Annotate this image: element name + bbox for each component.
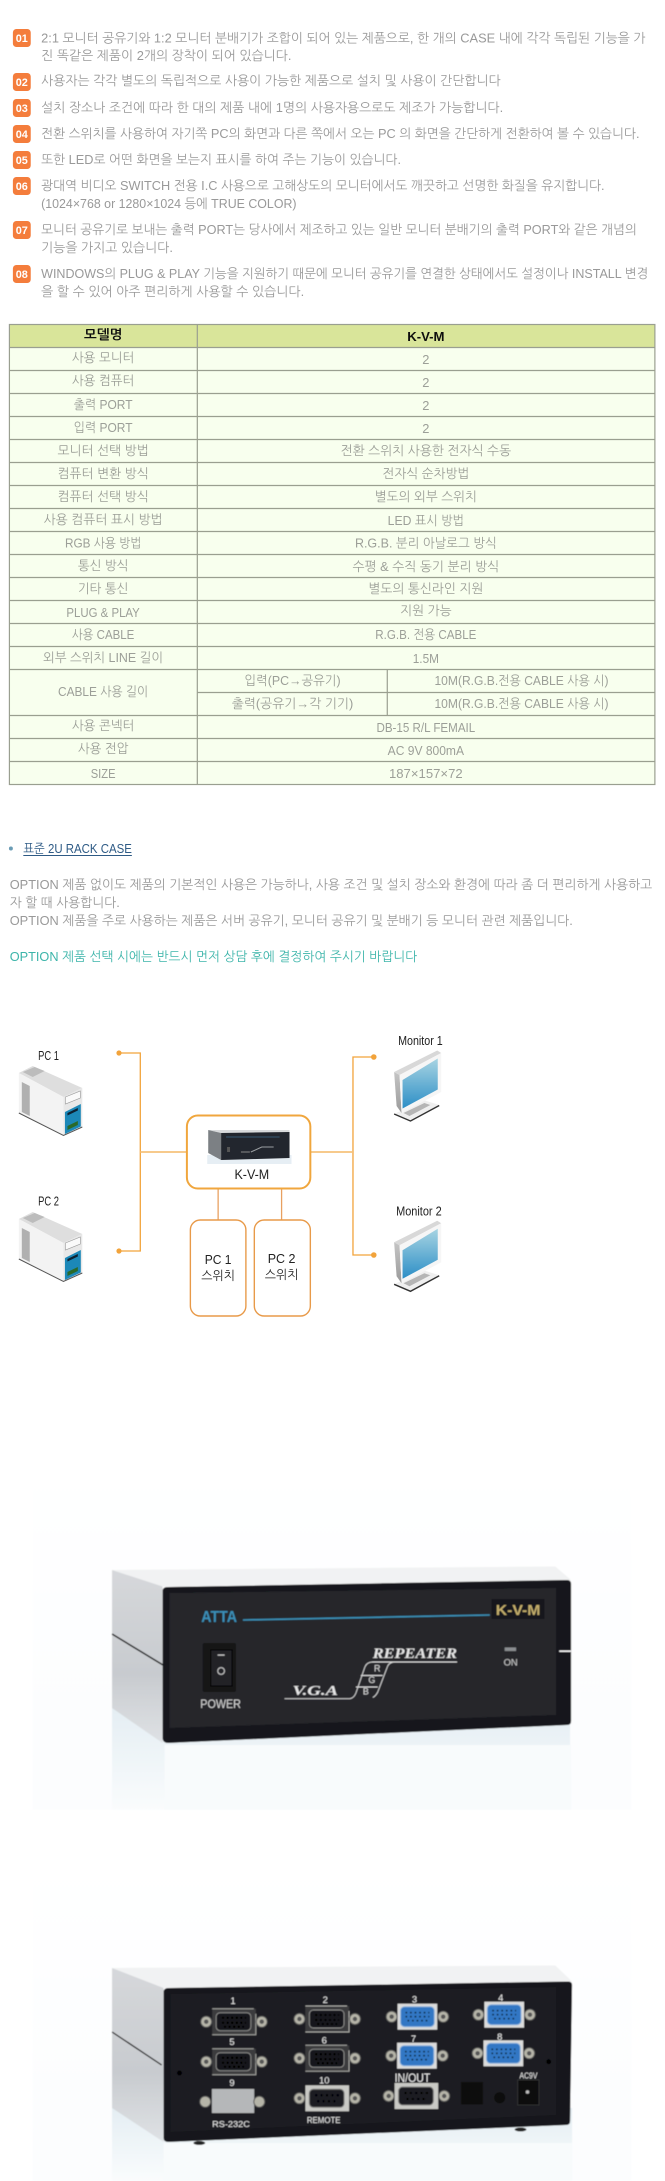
table rows: 수평 & 수직 동기 분리 방식 xyxy=(352,559,499,574)
table header: 모델명 xyxy=(84,327,122,342)
option description xyxy=(10,877,652,928)
badge 02: 02 xyxy=(16,77,28,89)
device body xyxy=(112,1966,572,2145)
PC 2: PC 2 xyxy=(38,1194,59,1209)
power switch xyxy=(200,1643,241,1711)
feature 01 text: 2:1 모니터 공유기와 1:2 모니터 분배기가 조합이 되어 있는 제품으로, 한 개의 CASE 내에 각각 독립된 기능을 가 xyxy=(41,30,645,46)
table rows: 입력(PC→공유기) xyxy=(244,673,341,688)
ON indicator: ON xyxy=(504,1657,518,1669)
option description: 자 할 때 사용합니다. xyxy=(10,895,120,910)
feature 08 text: WINDOWS의 PLUG & PLAY 기능을 지원하기 때문에 모니터 공유기를 연결한 상태에서도 설정이나 INSTALL 변경 xyxy=(41,266,648,281)
device body xyxy=(112,1566,571,1743)
ATTA logo: ATTA xyxy=(201,1609,237,1626)
specification table xyxy=(9,324,655,784)
serial ports xyxy=(294,2083,450,2111)
PC 1: PC 1 xyxy=(38,1049,59,1063)
table header xyxy=(84,327,444,344)
badge 04 xyxy=(13,125,31,143)
feature 07 text: 모니터 공유기로 보내는 출력 PORT는 당사에서 제조하고 있는 일반 모니터 분배기의 출력 PORT와 같은 개념의 xyxy=(41,222,637,237)
port labels: 9 xyxy=(229,2078,235,2089)
badge 04: 04 xyxy=(16,129,29,141)
table rows: 10M(R.G.B.전용 CABLE 사용 시) xyxy=(434,696,609,711)
Monitor 1: Monitor 1 xyxy=(398,1034,443,1048)
badge 01: 01 xyxy=(16,33,28,45)
badge 08: 08 xyxy=(16,269,28,281)
K-V-M box: K-V-M xyxy=(234,1166,269,1182)
PC 1 switch box xyxy=(190,1220,246,1316)
port labels: 4 xyxy=(498,1993,503,2004)
table rows: 전환 스위치 사용한 전자식 수동 xyxy=(341,443,511,458)
PC 2 switch box: 스위치 xyxy=(265,1268,298,1282)
table rows: 별도의 통신라인 지원 xyxy=(368,581,483,596)
port labels: 2 xyxy=(323,1995,328,2006)
table rows: 외부 스위치 LINE 길이 xyxy=(43,650,163,665)
port labels: REMOTE xyxy=(307,2115,341,2125)
table rows: R.G.B. 전용 CABLE xyxy=(375,627,477,642)
table rows: 전자식 순차방법 xyxy=(382,466,469,481)
table rows: 2 xyxy=(422,352,429,367)
table rows: 사용 컴퓨터 표시 방법 xyxy=(44,512,163,527)
port labels: 6 xyxy=(322,2035,327,2047)
port labels: 8 xyxy=(497,2032,502,2043)
V.G.A RGB repeater logo: REPEATER xyxy=(372,1646,457,1662)
table rows: 컴퓨터 변환 방식 xyxy=(58,466,149,481)
ATTA logo xyxy=(201,1609,490,1626)
feature 01 text xyxy=(41,30,645,63)
table rows: 컴퓨터 선택 방식 xyxy=(58,489,149,504)
table rows: 기타 통신 xyxy=(78,581,128,596)
option section heading: 표준 2U RACK CASE xyxy=(23,841,132,856)
table rows: 2 xyxy=(422,375,429,390)
port labels: 5 xyxy=(229,2037,235,2048)
badge 02 xyxy=(13,73,31,91)
feature 07 text: 기능을 가지고 있습니다. xyxy=(41,240,173,255)
K-V-M plate: K-V-M xyxy=(496,1602,540,1619)
table rows: 1.5M xyxy=(413,651,439,666)
badge 03: 03 xyxy=(16,103,28,115)
feature 03 text: 설치 장소나 조건에 따라 한 대의 제품 내에 1명의 사용자용으로도 제조가 가능합니다. xyxy=(41,100,503,115)
table rows: 별도의 외부 스위치 xyxy=(375,489,477,504)
table rows xyxy=(43,350,609,781)
Monitor 1 xyxy=(394,1034,443,1121)
port labels: IN/OUT xyxy=(395,2071,431,2085)
table rows: 모니터 선택 방법 xyxy=(58,443,149,458)
table rows: 사용 모니터 xyxy=(72,350,134,365)
port labels: 3 xyxy=(412,1994,417,2006)
option notice: OPTION 제품 선택 시에는 반드시 먼저 상담 후에 결정하여 주시기 바랍니다 xyxy=(10,949,417,964)
port labels: 7 xyxy=(411,2034,416,2045)
feature 06 text xyxy=(41,178,605,211)
table rows: 사용 컴퓨터 xyxy=(72,373,134,388)
PC 1 xyxy=(19,1049,82,1136)
table rows: 출력 PORT xyxy=(74,397,133,412)
table rows: 지원 가능 xyxy=(400,603,452,618)
badge 01 xyxy=(13,29,31,47)
PC 2 switch box xyxy=(254,1220,310,1316)
product photo: rear xyxy=(33,1810,632,2181)
option description: OPTION 제품을 주로 사용하는 제품은 서버 공유기, 모니터 공유기 및 분배기 등 모니터 관련 제품입니다. xyxy=(10,913,573,928)
table rows: RGB 사용 방법 xyxy=(65,535,141,551)
port labels: AC9V xyxy=(520,2071,538,2081)
power switch: POWER xyxy=(200,1699,241,1711)
badge 07 xyxy=(13,221,31,239)
table rows: DB-15 R/L FEMAIL xyxy=(376,720,475,735)
V.G.A RGB repeater logo xyxy=(285,1646,457,1699)
badge 06 xyxy=(13,177,31,195)
PC 1 switch box: 스위치 xyxy=(201,1269,235,1283)
table rows: 사용 CABLE xyxy=(72,627,135,642)
table rows: 2 xyxy=(422,398,429,413)
blue VGA ports xyxy=(386,2002,535,2069)
ON indicator xyxy=(504,1648,518,1669)
port labels: 1 xyxy=(230,1996,236,2007)
K-V-M plate xyxy=(492,1599,544,1619)
PC 2 switch box: PC 2 xyxy=(268,1252,296,1266)
table rows: PLUG & PLAY xyxy=(66,605,140,620)
badge 08 xyxy=(13,265,31,283)
table rows: 입력 PORT xyxy=(74,420,133,435)
feature 04 text: 전환 스위치를 사용하여 자기쪽 PC의 화면과 다른 쪽에서 오는 PC 의 화면을 간단하게 전환하여 볼 수 있습니다. xyxy=(41,126,640,141)
V.G.A RGB repeater logo: R xyxy=(374,1663,381,1674)
connector lines xyxy=(116,1050,377,1258)
feature list xyxy=(13,29,648,299)
table rows: 출력(공유기→각 기기) xyxy=(232,696,353,711)
power and auxiliary ports xyxy=(461,2080,539,2105)
table rows: 2 xyxy=(422,421,429,436)
table rows: 사용 콘넥터 xyxy=(72,718,134,733)
port labels xyxy=(212,1993,538,2129)
table rows: 10M(R.G.B.전용 CABLE 사용 시) xyxy=(434,673,609,688)
connection diagram xyxy=(19,1034,443,1316)
feature 06 text: 광대역 비디오 SWITCH 전용 I.C 사용으로 고해상도의 모니터에서도 깨끗하고 선명한 화질을 유지합니다. xyxy=(41,178,605,193)
table rows: R.G.B. 분리 아날로그 방식 xyxy=(355,535,497,551)
table rows: 통신 방식 xyxy=(78,558,128,573)
table rows: AC 9V 800mA xyxy=(388,743,464,758)
feature 02 text: 사용자는 각각 별도의 독립적으로 사용이 가능한 제품으로 설치 및 사용이 간단합니다 xyxy=(41,73,501,88)
V.G.A RGB repeater logo: G xyxy=(368,1675,375,1685)
V.G.A RGB repeater logo: B xyxy=(363,1686,369,1697)
dark VGA ports xyxy=(201,2006,360,2075)
V.G.A RGB repeater logo: V.G.A xyxy=(292,1684,338,1699)
K-V-M box xyxy=(187,1116,310,1188)
port labels: 10 xyxy=(319,2075,329,2087)
table rows: 사용 전압 xyxy=(78,741,128,756)
table rows: 187×157×72 xyxy=(389,766,463,781)
badge 03 xyxy=(13,99,31,117)
table header: K-V-M xyxy=(407,329,444,344)
PC 1 switch box: PC 1 xyxy=(205,1253,232,1267)
option description: OPTION 제품 없이도 제품의 기본적인 사용은 가능하나, 사용 조건 및 설치 장소와 환경에 따라 좀 더 편리하게 사용하고 xyxy=(10,877,652,892)
feature 06 text: (1024×768 or 1280×1024 등에 TRUE COLOR) xyxy=(41,196,297,211)
table rows: SIZE xyxy=(91,766,116,781)
RS-232C plate xyxy=(200,2089,265,2113)
feature 01 text: 진 똑같은 제품이 2개의 장착이 되어 있습니다. xyxy=(41,48,292,63)
feature 08 text xyxy=(41,266,648,299)
feature 05 text: 또한 LED로 어떤 화면을 보는지 표시를 하여 주는 기능이 있습니다. xyxy=(41,152,401,167)
badge 05 xyxy=(13,151,31,169)
badge 06: 06 xyxy=(16,181,28,193)
PC 2 xyxy=(19,1194,82,1282)
port labels: RS-232C xyxy=(212,2119,250,2129)
Monitor 2 xyxy=(394,1204,442,1291)
table rows: CABLE 사용 길이 xyxy=(58,684,148,699)
feature 08 text: 을 할 수 있어 아주 편리하게 사용할 수 있습니다. xyxy=(41,284,304,299)
product photo: front xyxy=(33,1410,632,1810)
badge 05: 05 xyxy=(16,155,28,167)
Monitor 2: Monitor 2 xyxy=(396,1204,442,1219)
table rows: LED 표시 방법 xyxy=(388,513,464,528)
badge 07: 07 xyxy=(16,225,28,237)
feature 07 text xyxy=(41,222,637,255)
